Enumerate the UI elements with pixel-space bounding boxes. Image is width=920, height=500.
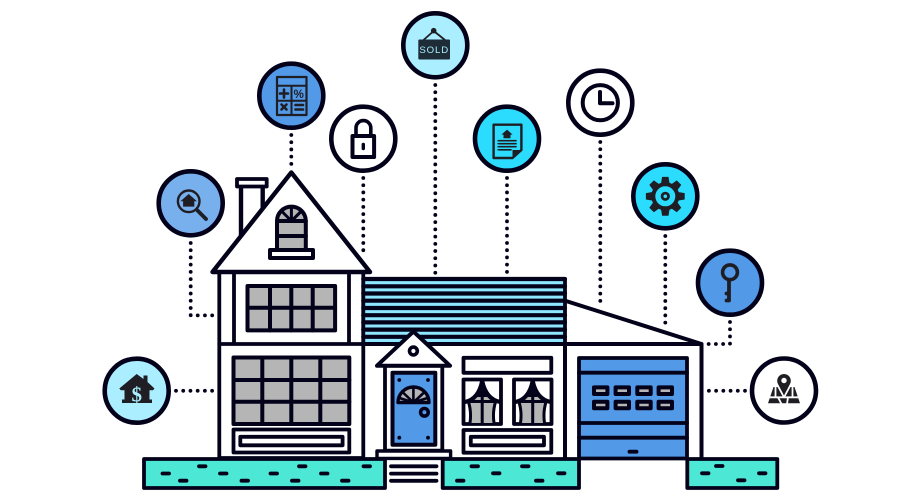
chimney [237, 179, 267, 236]
porch steps [391, 466, 436, 481]
icon: calculator [259, 64, 323, 128]
icon: sold sign: SOLD [419, 45, 449, 56]
icon: clock [568, 71, 632, 135]
connector: calculator [289, 135, 293, 164]
icon: house with dollar: $ [132, 382, 142, 406]
icon: map pin [752, 358, 816, 422]
icon: calculator: % [294, 89, 304, 101]
centre and garage walls [363, 301, 702, 458]
upper window [248, 286, 335, 330]
lawn right [687, 459, 777, 488]
connector: map [708, 389, 745, 393]
porch [377, 332, 451, 458]
gable roof [212, 172, 370, 272]
garage door windows [594, 387, 672, 408]
icon: padlock [331, 107, 395, 171]
striped roof [363, 279, 565, 344]
door [392, 373, 435, 445]
connector: document [505, 178, 509, 273]
connector: key [708, 322, 730, 344]
shop transom [464, 358, 551, 373]
curtain window left [464, 380, 501, 424]
connector: gear [663, 236, 667, 327]
left building walls [219, 272, 363, 458]
connector: clock [598, 142, 602, 302]
dormer window [270, 207, 313, 258]
connector: money house [176, 389, 212, 393]
lawn left [144, 459, 385, 488]
lower window [234, 358, 349, 424]
connector: sold sign [433, 85, 437, 273]
connector: search [191, 243, 212, 315]
lawn centre [443, 459, 579, 488]
garage door [579, 358, 687, 458]
lower window planter [234, 430, 349, 452]
curtain window right [514, 380, 552, 424]
icon: house search [159, 171, 223, 235]
house illustration [144, 172, 777, 488]
icon: sold sign [403, 13, 467, 77]
icon: key [698, 251, 762, 315]
shop planter [464, 430, 551, 453]
icon: gear [633, 164, 697, 228]
icon: house with dollar [105, 359, 169, 423]
icon: property document [475, 107, 539, 171]
connector: lock [361, 178, 365, 251]
